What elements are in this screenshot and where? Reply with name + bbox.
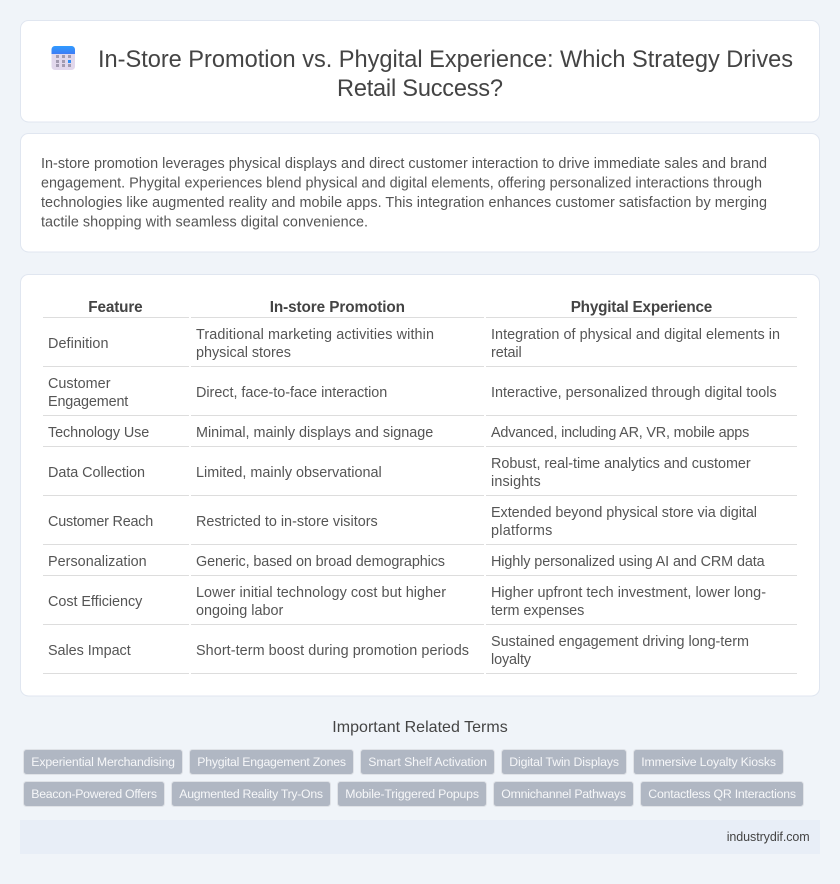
row: Customer Reach: platforms — [491, 523, 552, 539]
row: Sales Impact: Sustained engagement driving long-term — [491, 634, 749, 650]
tag: Experiential Merchandising — [24, 750, 182, 774]
panel: comparison table — [20, 274, 820, 696]
tag: Contactless QR Interactions — [640, 782, 804, 806]
row: Customer Engagement — [48, 376, 777, 410]
title: Retail Success? — [337, 76, 503, 102]
tag: Mobile-Triggered Popups — [338, 782, 486, 806]
panel: intro text — [20, 134, 820, 252]
row: Definition: Traditional marketing activities within — [196, 327, 434, 343]
tag: Digital Twin Displays — [502, 750, 626, 774]
row: Sales Impact: Sales Impact — [48, 643, 131, 659]
footer site name: industrydif.com — [727, 830, 810, 844]
row: Sales Impact: loyalty — [491, 652, 532, 668]
row: Data Collection — [48, 456, 751, 490]
tag: Beacon-Powered Offers: Beacon-Powered Offers — [31, 787, 157, 801]
row: Data Collection: Robust, real-time analytics and customer — [491, 456, 751, 472]
tag: Phygital Engagement Zones — [190, 750, 354, 774]
footer bar — [20, 820, 820, 854]
row: Data Collection: insights — [491, 474, 541, 490]
row: Customer Engagement: Customer — [48, 376, 111, 392]
row: Definition: Definition — [48, 336, 108, 352]
tag: Immersive Loyalty Kiosks: Immersive Loyalty Kiosks — [641, 755, 776, 769]
row: Data Collection: Data Collection — [48, 465, 145, 481]
row: Technology Use: Advanced, including AR, VR, mobile apps — [491, 425, 749, 441]
tag: Augmented Reality Try-Ons — [172, 782, 330, 806]
row: Definition: Integration of physical and digital elements in — [491, 327, 780, 343]
tag: Augmented Reality Try-Ons: Augmented Reality Try-Ons — [179, 787, 323, 801]
tag: Smart Shelf Activation: Smart Shelf Activation — [368, 755, 487, 769]
row: Customer Engagement: Interactive, personalized through digital tools — [491, 385, 777, 401]
tag: Phygital Engagement Zones: Phygital Engagement Zones — [197, 755, 346, 769]
row: Customer Engagement: Direct, face-to-face interaction — [196, 385, 387, 401]
row: Cost Efficiency: Higher upfront tech investment, lower long- — [491, 585, 766, 601]
table header — [88, 299, 712, 316]
row: Sales Impact — [48, 634, 749, 668]
table header: Phygital Experience — [571, 299, 712, 316]
intro paragraph: technologies like augmented reality and mobile apps. This integration enhances customer satisfaction by merging — [41, 195, 767, 211]
title: In-Store Promotion vs. Phygital Experience: Which Strategy Drives — [98, 47, 793, 73]
table header: In-store Promotion — [270, 299, 405, 316]
table header: Feature — [88, 299, 143, 316]
row: Customer Reach: Extended beyond physical store via digital — [491, 505, 757, 521]
panel: title card — [20, 20, 820, 122]
tag: Smart Shelf Activation — [360, 750, 494, 774]
row: Personalization: Personalization — [48, 554, 147, 570]
tag: Omnichannel Pathways — [494, 782, 634, 806]
row: Cost Efficiency: Lower initial technology cost but higher — [196, 585, 446, 601]
intro paragraph: tactile shopping with seamless digital convenience. — [41, 214, 368, 230]
tag: Beacon-Powered Offers — [24, 782, 164, 806]
tag: Experiential Merchandising: Experiential Merchandising — [31, 755, 175, 769]
row: Cost Efficiency: ongoing labor — [196, 603, 284, 619]
tag: Mobile-Triggered Popups: Mobile-Triggered Popups — [345, 787, 479, 801]
row: Cost Efficiency: term expenses — [491, 603, 584, 619]
row: Technology Use: Minimal, mainly displays and signage — [196, 425, 433, 441]
row: Cost Efficiency: Cost Efficiency — [48, 594, 143, 610]
tag: Omnichannel Pathways: Omnichannel Pathways — [501, 787, 626, 801]
row: Definition — [48, 327, 780, 361]
row: Definition: physical stores — [196, 345, 291, 361]
row: Technology Use: Technology Use — [48, 425, 149, 441]
intro paragraph: engagement. Phygital experiences blend physical and digital elements, offering personalized interactions through — [41, 176, 762, 192]
row: Personalization — [48, 554, 765, 570]
row: Technology Use — [48, 425, 749, 441]
row: Personalization: Generic, based on broad demographics — [196, 554, 445, 570]
tag: Contactless QR Interactions: Contactless QR Interactions — [648, 787, 796, 801]
row: Definition: retail — [491, 345, 522, 361]
row: Customer Reach: Customer Reach — [48, 514, 153, 530]
tag: Digital Twin Displays: Digital Twin Displays — [509, 755, 619, 769]
row: Cost Efficiency — [48, 585, 766, 619]
row: Sales Impact: Short-term boost during promotion periods — [196, 643, 469, 659]
related term tags — [24, 750, 804, 806]
icon: calendar — [52, 46, 75, 70]
row: Customer Reach: Restricted to in-store visitors — [196, 514, 378, 530]
row: Personalization: Highly personalized using AI and CRM data — [491, 554, 765, 570]
heading: related terms: Important Related Terms — [332, 719, 508, 736]
intro paragraph: In-store promotion leverages physical displays and direct customer interaction to drive immediate sales and brand — [41, 156, 767, 172]
row: Customer Reach — [48, 505, 757, 539]
row: Customer Engagement: Engagement — [48, 394, 128, 410]
tag: Immersive Loyalty Kiosks — [634, 750, 784, 774]
row: Data Collection: Limited, mainly observational — [196, 465, 382, 481]
